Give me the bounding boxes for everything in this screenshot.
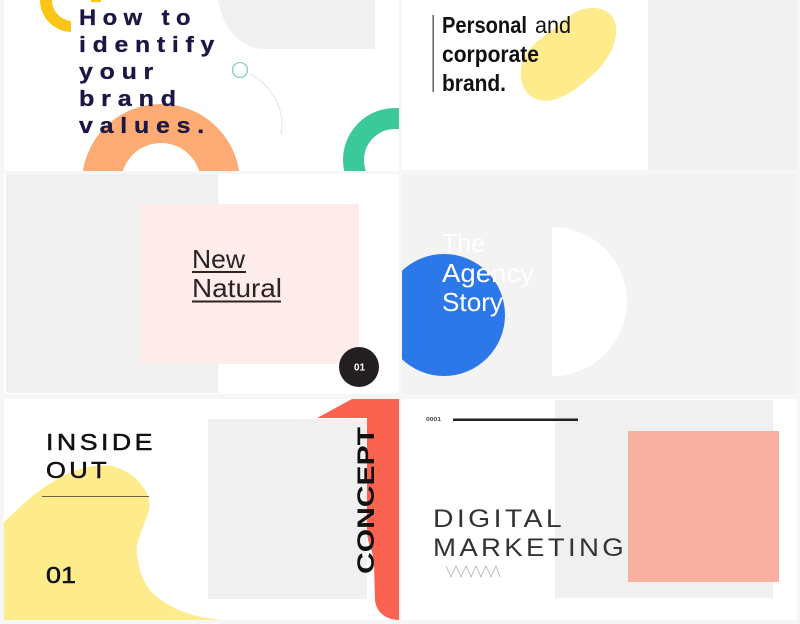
panel: digital marketing [402,399,797,620]
heading: DIGITAL [433,505,565,533]
pink block [140,204,359,364]
heading [78,9,214,134]
panel: new natural [4,174,399,394]
blue circle [402,254,505,376]
heading: MARKETING [433,534,627,562]
white half circle [552,227,627,376]
panel: the agency story [402,227,627,376]
heading [442,228,534,317]
red shape [317,399,399,620]
heading text: brand. [442,70,506,96]
yellow ring fragment [91,0,101,2]
vertical rule [432,15,434,92]
heading: values. [79,113,211,138]
vertical concept label: CONCEPT [353,427,380,574]
page number: 0001 [426,417,441,423]
divider line [42,496,149,497]
heading: identify [79,32,221,57]
heading [433,505,627,562]
grey block [555,400,773,598]
grey block [648,0,797,170]
heading: Natural [192,273,282,303]
green ring [343,108,399,171]
yellow wave [4,465,223,620]
heading text: and [535,12,571,38]
zigzag [446,566,500,577]
orange arch [82,104,240,171]
salmon square [628,431,779,582]
small teal circle [232,62,248,78]
heading: How to [79,5,197,30]
panel: personal and corporate brand [402,0,797,170]
thin arc [250,74,282,134]
yellow ring [40,0,71,32]
grey rounded block [218,0,375,49]
panel: inside out concept [4,399,399,620]
heading: OUT [46,457,110,483]
grey block [208,419,367,599]
heading: The [442,228,485,258]
heading text: Personal [442,12,527,38]
heading: brand [79,86,183,111]
heading [46,429,156,483]
number badge: 01 [354,362,365,374]
heading: Agency [442,258,534,288]
yellow blob [521,8,616,101]
heading text [442,12,571,96]
top rule [453,418,578,421]
heading: INSIDE [46,429,156,455]
panel: how to identify your brand values [4,0,399,171]
heading: Story [442,287,503,317]
number badge [339,347,379,387]
heading [192,244,282,303]
heading: New [192,244,245,274]
grey block [6,174,218,393]
heading: your [79,59,160,84]
number: 01 [46,562,76,588]
heading text: corporate [442,41,539,67]
